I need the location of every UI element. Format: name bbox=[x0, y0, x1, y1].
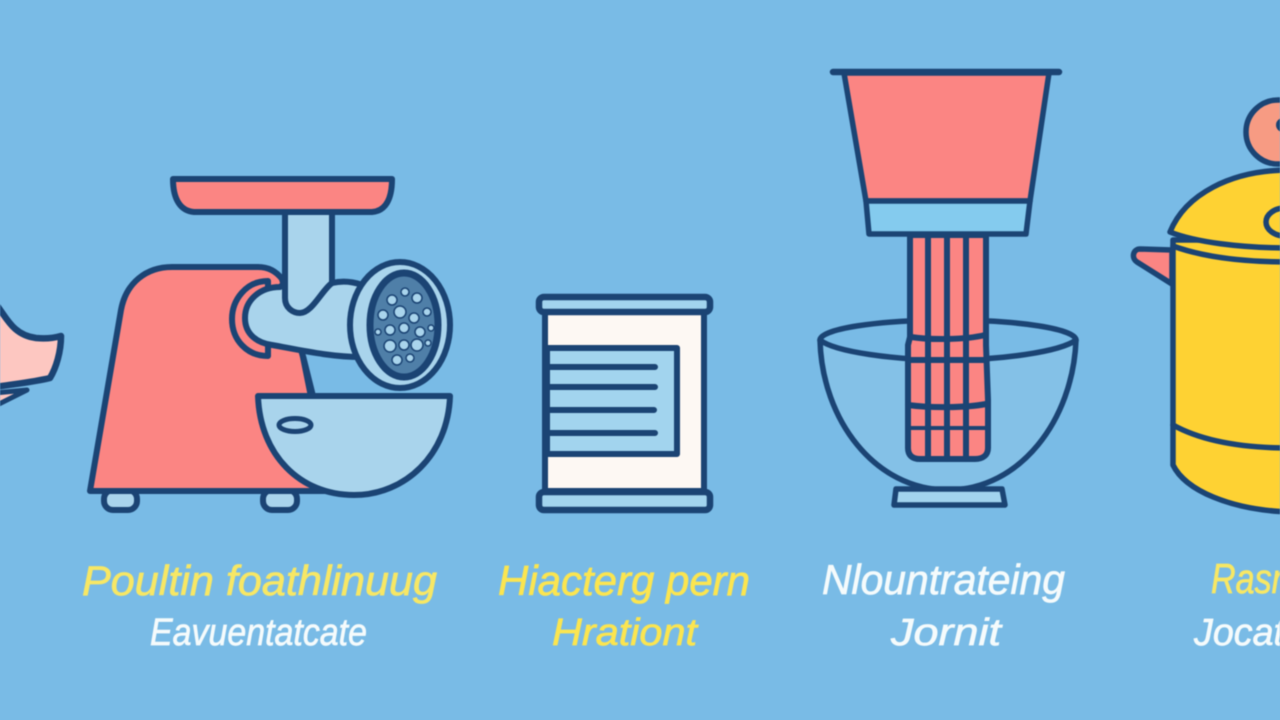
icon: poultry piece, cropped at left edge bbox=[0, 303, 61, 406]
label: step 2: Hrationt bbox=[552, 612, 699, 654]
bowl handle slot bbox=[279, 418, 311, 432]
label: step 1: Poultin foathlinuug bbox=[82, 557, 437, 604]
knob eye bbox=[1277, 119, 1280, 131]
can top rim bbox=[539, 297, 710, 312]
meat strands bbox=[908, 235, 988, 459]
funnel collar bbox=[866, 201, 1030, 234]
funnel top rim bbox=[833, 69, 1059, 75]
motor collar bbox=[232, 281, 268, 356]
can bottom rim bbox=[539, 492, 710, 510]
pot body bbox=[1173, 240, 1280, 512]
icon: funnel and bowl with strands bbox=[820, 72, 1076, 505]
can body bbox=[545, 312, 704, 491]
grinder body bbox=[90, 267, 330, 491]
label: step 1 bbox=[82, 557, 437, 654]
label: step 2 bbox=[498, 557, 750, 654]
grinding tube bbox=[245, 282, 372, 357]
base band line bbox=[1173, 425, 1280, 448]
pot lid bbox=[1170, 170, 1280, 248]
support bracket bbox=[303, 356, 313, 396]
label: step 3 bbox=[822, 556, 1065, 654]
feed tray bbox=[173, 179, 392, 212]
rim line bbox=[1173, 246, 1280, 262]
funnel hopper bbox=[844, 73, 1049, 201]
label: step 3: Jornit bbox=[890, 612, 1003, 654]
mixing bowl bbox=[820, 340, 1076, 490]
icon: tin can bbox=[539, 297, 710, 510]
grinder feet bbox=[104, 490, 297, 510]
bowl back rim bbox=[820, 320, 1076, 360]
pot side handle bbox=[1133, 249, 1172, 284]
label: step 3: Nlountrateing bbox=[822, 556, 1065, 603]
label: step 1: Eavuentatcate bbox=[150, 612, 367, 654]
perforated disc bbox=[370, 273, 438, 377]
disc holes bbox=[375, 288, 434, 365]
grinder head plate bbox=[350, 262, 450, 388]
lid knob bbox=[1246, 100, 1280, 164]
collection bowl bbox=[258, 396, 450, 495]
can label with lines bbox=[547, 348, 677, 454]
bowl foot bbox=[894, 489, 1005, 505]
label: step 2: Hiacterg pern bbox=[498, 557, 750, 604]
label: step 4, cropped at right edge bbox=[1193, 555, 1280, 654]
icon: meat grinder bbox=[90, 179, 450, 510]
feed chute bbox=[285, 212, 332, 313]
lid handle ring bbox=[1266, 208, 1280, 236]
icon: yellow stock pot, cropped at right edge bbox=[1133, 100, 1280, 512]
